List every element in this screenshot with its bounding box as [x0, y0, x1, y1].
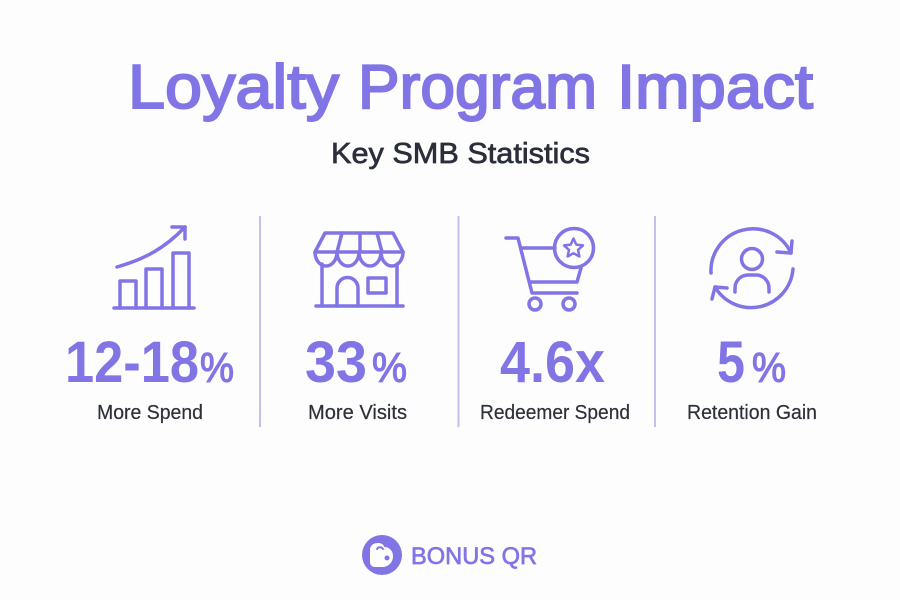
icon: logo badge: [362, 535, 402, 575]
panel: more visits: [305, 233, 407, 424]
label: more spend: More Spend: [97, 402, 203, 424]
icon: storefront: [315, 233, 403, 306]
stat: 5%: 5: [717, 330, 745, 395]
stat: 33%: %: [372, 344, 407, 391]
title: Impact: [617, 53, 813, 122]
label: retention gain: Retention Gain: [687, 402, 817, 424]
stat: 12-18%: 12-18: [65, 330, 199, 395]
icon: person with cycle arrows: [711, 229, 793, 308]
icon: rising bar chart: [114, 227, 194, 308]
title: Loyalty: [128, 53, 339, 122]
label: redeemer spend: Redeemer Spend: [480, 402, 630, 424]
logo: bonus qr: [362, 535, 537, 575]
stat: 12-18%: %: [200, 344, 234, 391]
stat: 33%: 33: [305, 330, 367, 395]
stat: 5%: [717, 330, 786, 395]
subtitle: Key SMB Statistics: [331, 138, 590, 170]
stat: 33%: [305, 330, 407, 395]
label: more visits: More Visits: [308, 402, 407, 424]
stat: 5%: %: [752, 344, 786, 391]
panel: more spend: [65, 227, 234, 424]
panel: redeemer spend: [480, 228, 630, 424]
title: [128, 53, 813, 122]
wordmark: BONUS QR: [411, 543, 537, 570]
title: Program: [358, 53, 597, 122]
stat: 4.6x: 4.6x: [500, 330, 605, 395]
icon: cart with star: [506, 228, 594, 310]
panel: retention gain: [687, 229, 817, 424]
